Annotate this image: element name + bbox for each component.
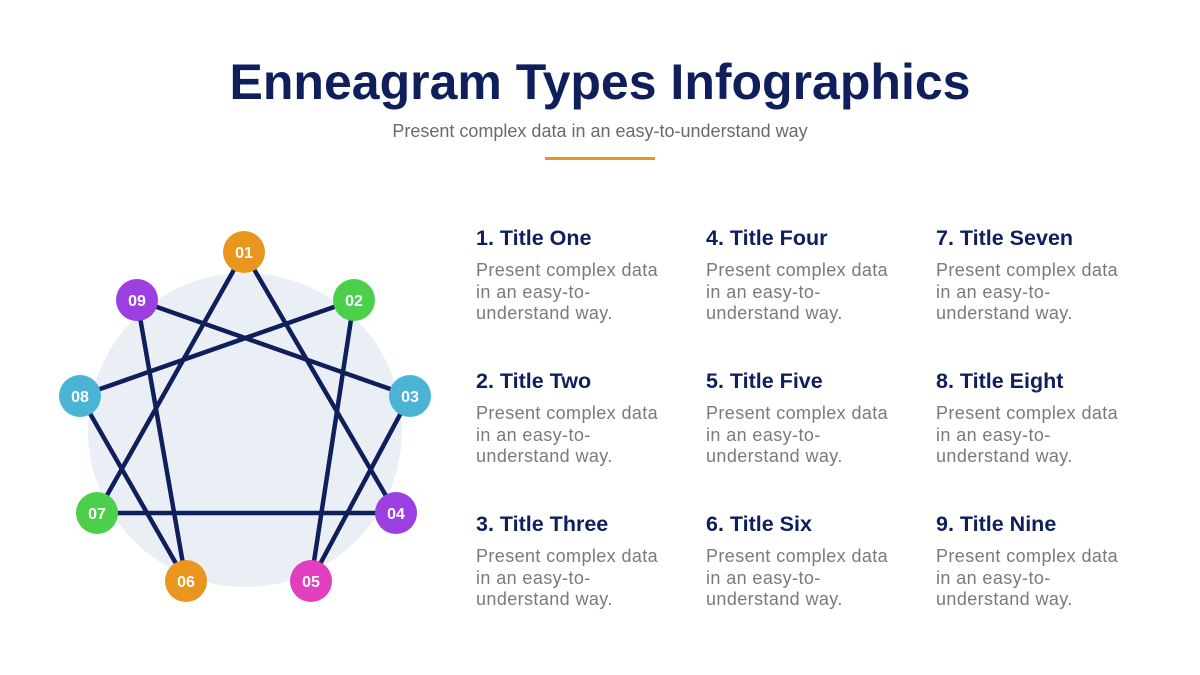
item 9	[936, 512, 1118, 609]
title: Enneagram Types Infographics	[230, 54, 970, 110]
item 9: understand way.	[936, 589, 1073, 609]
item 1	[476, 226, 658, 323]
item 6: Present complex data	[706, 546, 888, 566]
item 1: 1. Title One	[476, 226, 592, 250]
item 9: Present complex data	[936, 546, 1118, 566]
enneagram diagram: 06	[177, 574, 195, 591]
item 5: Present complex data	[706, 403, 888, 423]
accent underline	[545, 157, 655, 160]
item 7: in an easy-to-	[936, 282, 1051, 302]
item 7	[936, 226, 1118, 323]
item 3: understand way.	[476, 589, 613, 609]
enneagram diagram: 02	[345, 293, 363, 310]
item 3: 3. Title Three	[476, 512, 608, 536]
enneagram diagram: 01	[235, 245, 253, 262]
item 3: Present complex data	[476, 546, 658, 566]
item 1: understand way.	[476, 303, 613, 323]
item 8: in an easy-to-	[936, 424, 1051, 444]
enneagram diagram: 09	[128, 293, 146, 310]
subtitle: Present complex data in an easy-to-understand way	[392, 121, 808, 141]
enneagram diagram: 08	[71, 389, 89, 406]
item 4: 4. Title Four	[706, 226, 827, 250]
item 1: in an easy-to-	[476, 282, 591, 302]
item 5: in an easy-to-	[706, 424, 821, 444]
item 7: 7. Title Seven	[936, 226, 1073, 250]
item 2: in an easy-to-	[476, 424, 591, 444]
item 5: 5. Title Five	[706, 369, 823, 393]
item 6	[706, 512, 888, 609]
enneagram diagram	[59, 231, 431, 602]
item 2: understand way.	[476, 446, 613, 466]
item 6: 6. Title Six	[706, 512, 812, 536]
item 9: 9. Title Nine	[936, 512, 1056, 536]
item 2	[476, 369, 658, 466]
enneagram diagram: 03	[401, 389, 419, 406]
item 3	[476, 512, 658, 609]
item 6: in an easy-to-	[706, 568, 821, 588]
item 7: Present complex data	[936, 260, 1118, 280]
enneagram diagram: 05	[302, 574, 320, 591]
item 7: understand way.	[936, 303, 1073, 323]
item 4	[706, 226, 888, 323]
item 4: understand way.	[706, 303, 843, 323]
item 8	[936, 369, 1118, 466]
item 8: 8. Title Eight	[936, 369, 1063, 393]
item 2: Present complex data	[476, 403, 658, 423]
item 5: understand way.	[706, 446, 843, 466]
item 8: understand way.	[936, 446, 1073, 466]
item 8: Present complex data	[936, 403, 1118, 423]
enneagram diagram: 07	[88, 506, 106, 523]
item 4: in an easy-to-	[706, 282, 821, 302]
item 3: in an easy-to-	[476, 568, 591, 588]
item 6: understand way.	[706, 589, 843, 609]
item 4: Present complex data	[706, 260, 888, 280]
enneagram diagram: 04	[387, 506, 405, 523]
item 1: Present complex data	[476, 260, 658, 280]
item 9: in an easy-to-	[936, 568, 1051, 588]
item 2: 2. Title Two	[476, 369, 591, 393]
item 5	[706, 369, 888, 466]
